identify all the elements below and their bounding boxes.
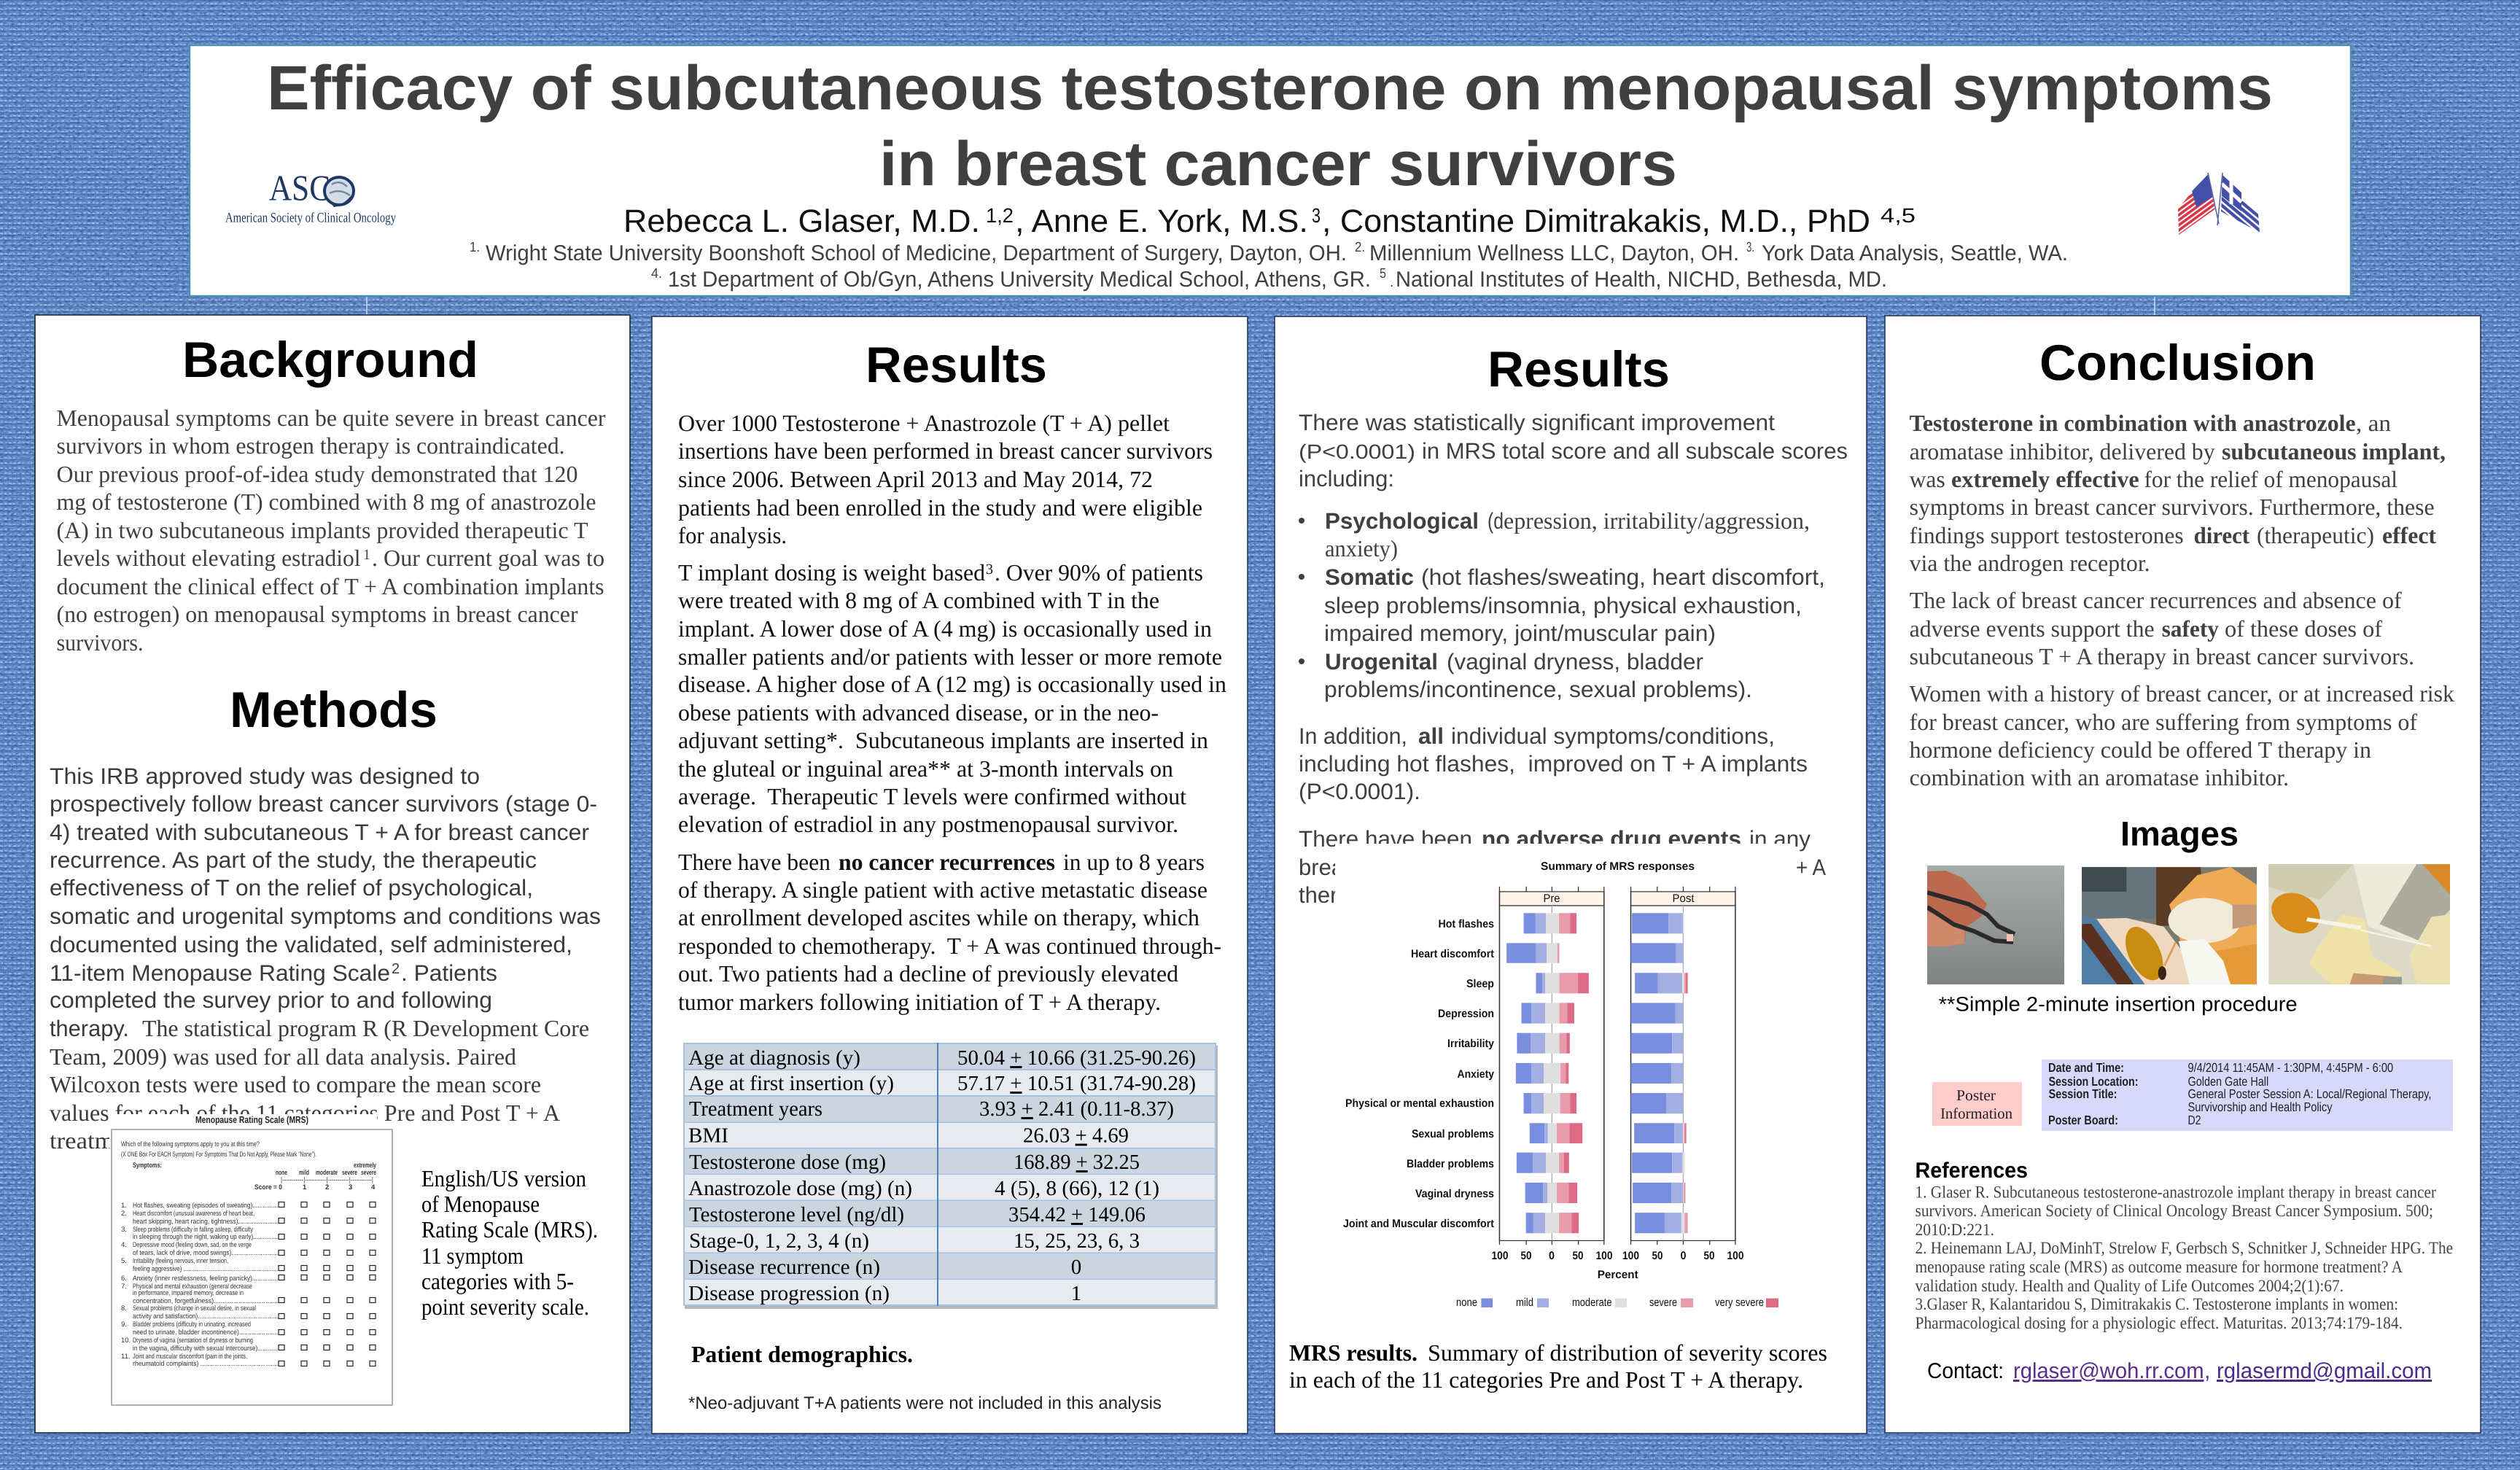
x axis tick labels: 0 bbox=[1680, 1250, 1686, 1262]
figure: Menopause Rating Scale form: concentration, forgetfulness).................................... bbox=[133, 1297, 278, 1305]
caption: MRS results: MRS results bbox=[1289, 1339, 1412, 1366]
table: patient demographics: 3.93 + 2.41 (0.11-8.37) bbox=[979, 1097, 1174, 1121]
figure: Menopause Rating Scale form: 4 bbox=[371, 1183, 376, 1191]
text block: methods: recurrence. As part of the study, the therapeutic bbox=[50, 847, 537, 873]
table: patient demographics: Testosterone dose (mg) bbox=[689, 1151, 886, 1174]
text block: background: (no estrogen) on menopausal symptoms in breast cancer bbox=[57, 601, 578, 627]
heading: Results: Results bbox=[866, 337, 1047, 393]
figure: Menopause Rating Scale form: need to urinate, bladder incontinence)...................... bbox=[133, 1329, 278, 1337]
symptom category labels bbox=[1343, 918, 1494, 1230]
text block: results narrative: of therapy. A single patient with active metastatic disease bbox=[678, 876, 1208, 903]
x axis tick labels: 50 bbox=[1703, 1250, 1715, 1262]
list: symptom subscales bbox=[1299, 508, 1825, 702]
text block: MRS improvement: (P<0.0001) bbox=[1299, 440, 1415, 463]
panel: conclusion, images and references bbox=[1885, 316, 2481, 1433]
text block: methods: . Patients bbox=[401, 960, 497, 986]
figure: Menopause Rating Scale form: Heart discomfort (unusual awareness of heart beat, bbox=[133, 1210, 254, 1218]
symptom category labels: Physical or mental exhaustion bbox=[1345, 1097, 1494, 1110]
heading: Background: Background bbox=[182, 332, 478, 388]
figure: Menopause Rating Scale form bbox=[109, 1114, 395, 1431]
text block: conclusion: for breast cancer, who are suffering from symptoms of bbox=[1910, 709, 2417, 735]
text block: conclusion: extremely effective bbox=[1951, 466, 2139, 492]
text block: conclusion: hormone deficiency could be offered T therapy in bbox=[1910, 736, 2371, 763]
contact emails: Contact: bbox=[1927, 1359, 2004, 1383]
text block: references: 2. Heinemann LAJ, DoMinhT, Strelow F, Gerbsch S, Schnitker J, Schneider HPG. The bbox=[1915, 1239, 2453, 1258]
caption: MRS form description: Rating Scale (MRS). bbox=[421, 1216, 598, 1242]
text block: conclusion: for the relief of menopausal bbox=[2144, 466, 2398, 492]
x axis tick labels: 100 bbox=[1492, 1250, 1508, 1262]
figure: Menopause Rating Scale form: Hot flashes, sweating (episodes of sweating)............... bbox=[133, 1202, 278, 1210]
text block: references: survivors. American Society of Clinical Oncology Breast Cancer Symposium. 500; bbox=[1915, 1202, 2433, 1221]
text block: background: document the clinical effect of T + A combination implants bbox=[57, 573, 604, 599]
affiliations: 2. bbox=[1355, 240, 1365, 255]
text block: references: validation study. Health and Quality of Life Outcomes 2004;2(1):67. bbox=[1915, 1277, 2344, 1296]
text block: results narrative: average. Therapeutic T levels were confirmed without bbox=[678, 783, 1186, 809]
text block: methods: prospectively follow breast cancer survivors (stage 0- bbox=[50, 791, 597, 817]
contact emails bbox=[1927, 1359, 2432, 1383]
text block: results narrative: since 2006. Between April 2013 and May 2014, 72 bbox=[678, 466, 1153, 492]
poster session details: 9/4/2014 11:45AM - 1:30PM, 4:45PM - 6:00 bbox=[2188, 1060, 2393, 1075]
figure: Menopause Rating Scale form: (X ONE Box For EACH Symptom) For Symptoms That Do Not Apply, Please Mark "None"). bbox=[121, 1151, 316, 1159]
text block: methods: values for each of the 11 categories Pre and Post T + A bbox=[50, 1100, 560, 1126]
authors: Rebecca L. Glaser, M.D. bbox=[623, 203, 980, 239]
text block: references bbox=[1915, 1183, 2453, 1333]
text block: results narrative: . Over 90% of patients bbox=[995, 559, 1203, 586]
affiliations: 3. bbox=[1746, 240, 1754, 255]
photo: skin prepared with iodine bbox=[2082, 867, 2257, 984]
affiliations: 1st Department of Ob/Gyn, Athens University Medical School, Athens, GR. bbox=[668, 268, 1371, 292]
text block: background: survivors in whom estrogen therapy is contraindicated. bbox=[57, 432, 564, 459]
authors: 1,2 bbox=[986, 204, 1014, 227]
figure: Menopause Rating Scale form: Which of the following symptoms apply to you at this time? bbox=[121, 1140, 260, 1148]
text block: results narrative: patients had been enrolled in the study and were eligible bbox=[678, 494, 1202, 521]
poster information label: Poster bbox=[1956, 1086, 1996, 1104]
caption: MRS form description: 11 symptom bbox=[421, 1242, 524, 1269]
figure: Menopause Rating Scale form: activity and satisfaction)............................................... bbox=[133, 1312, 278, 1321]
caption: insertion procedure: **Simple 2-minute insertion procedure bbox=[1939, 993, 2298, 1015]
table: patient demographics: Age at diagnosis (y) bbox=[688, 1046, 860, 1070]
x axis tick labels: 50 bbox=[1652, 1250, 1662, 1262]
text block: results narrative: in up to 8 years bbox=[1063, 849, 1205, 875]
footnote: neo-adjuvant patients: *Neo-adjuvant T+A patients were not included in this analysis bbox=[688, 1393, 1162, 1413]
text block: results narrative: implant. A lower dose of A (4 mg) is occasionally used in bbox=[678, 615, 1212, 642]
x axis tick labels: 100 bbox=[1622, 1250, 1639, 1262]
text block: background: 1 bbox=[363, 547, 370, 563]
text block: methods: therapy. bbox=[50, 1016, 129, 1041]
caption: MRS results bbox=[1289, 1339, 1827, 1393]
symptom category labels: Joint and Muscular discomfort bbox=[1343, 1218, 1494, 1230]
figure: Menopause Rating Scale form: none bbox=[276, 1169, 287, 1177]
symptom category labels: Vaginal dryness bbox=[1415, 1188, 1494, 1200]
figure: Menopause Rating Scale form: 6. bbox=[121, 1275, 127, 1283]
list: symptom subscales: impaired memory, joint/muscular pain) bbox=[1324, 621, 1716, 646]
panel: results part 1 bbox=[652, 316, 1248, 1434]
text block: methods: somatic and urogenital symptoms and conditions was bbox=[50, 903, 601, 929]
text block: results narrative: Over 1000 Testosterone + Anastrozole (T + A) pellet bbox=[678, 410, 1170, 436]
symptom category labels: Bladder problems bbox=[1407, 1158, 1494, 1170]
text block: results narrative: no cancer recurrences bbox=[839, 849, 1055, 875]
text block: conclusion: The lack of breast cancer recurrences and absence of bbox=[1910, 587, 2402, 613]
title: Efficacy of subcutaneous testosterone on menopausal symptoms bbox=[267, 53, 2273, 123]
table: patient demographics bbox=[683, 1043, 1218, 1309]
text block: MRS improvement: including: bbox=[1299, 466, 1394, 491]
affiliations: Millennium Wellness LLC, Dayton, OH. bbox=[1369, 241, 1739, 265]
text block: conclusion: (therapeutic) bbox=[2257, 522, 2374, 548]
figure: Menopause Rating Scale form: Sexual problems (change in sexual desire, in sexual bbox=[133, 1304, 256, 1312]
text block: conclusion: direct bbox=[2194, 522, 2249, 548]
heading: Images: Images bbox=[2120, 814, 2239, 853]
text block: adverse events: in any bbox=[1749, 826, 1811, 852]
text block: conclusion: Testosterone in combination with anastrozole bbox=[1910, 410, 2356, 436]
text block: results narrative: tumor markers following initiation of T + A therapy. bbox=[678, 989, 1161, 1015]
list: symptom subscales: problems/incontinence, sexual problems). bbox=[1324, 677, 1752, 702]
symptom category labels: Heart discomfort bbox=[1411, 948, 1494, 960]
figure: Menopause Rating Scale form: in performance, impaired memory, decrease in bbox=[133, 1289, 244, 1297]
text block: results narrative: out. Two patients had a decline of previously elevated bbox=[678, 960, 1178, 987]
figure: Menopause Rating Scale form: Depressive mood (feeling down, sad, on the verge bbox=[133, 1241, 252, 1249]
text block: background: Our previous proof-of-idea study demonstrated that 120 bbox=[57, 461, 578, 487]
figure: Menopause Rating Scale form: mild bbox=[299, 1169, 309, 1177]
figure: Menopause Rating Scale form: 1 bbox=[303, 1183, 307, 1191]
figure: Menopause Rating Scale form: in sleeping through the night, waking up early)............... bbox=[133, 1233, 278, 1241]
figure: Menopause Rating Scale form: Bladder problems (difficulty in urinating, increased bbox=[133, 1321, 251, 1329]
text block: results narrative: at enrollment developed ascites while on therapy, which bbox=[678, 904, 1199, 930]
authors: , Constantine Dimitrakakis, M.D., PhD bbox=[1322, 203, 1870, 239]
symptom category labels: Sexual problems bbox=[1412, 1128, 1494, 1140]
text block: conclusion: subcutaneous implant, bbox=[2222, 438, 2446, 464]
text block: conclusion: subcutaneous T + A therapy in breast cancer survivors. bbox=[1910, 643, 2414, 669]
text block: background: Menopausal symptoms can be quite severe in breast cancer bbox=[57, 405, 606, 431]
table: patient demographics: 168.89 + 32.25 bbox=[1014, 1151, 1140, 1174]
contact emails: rglasermd@gmail.com bbox=[2217, 1359, 2432, 1383]
affiliations bbox=[470, 240, 2068, 292]
text block: methods: 4) treated with subcutaneous T + A for breast cancer bbox=[50, 820, 589, 845]
authors bbox=[623, 203, 1916, 239]
text block: methods: completed the survey prior to and following bbox=[50, 987, 492, 1013]
text block: results narrative: T implant dosing is weight based bbox=[678, 559, 985, 586]
logo: ASCO: American Society of Clinical Oncology bbox=[225, 210, 396, 226]
panel: background and methods bbox=[35, 315, 630, 1433]
caption: MRS results: Summary of distribution of severity scores bbox=[1428, 1339, 1827, 1366]
table: patient demographics: 57.17 + 10.51 (31.74-90.28) bbox=[957, 1072, 1196, 1095]
list: symptom subscales: Psychological bbox=[1325, 508, 1479, 534]
title: in breast cancer survivors bbox=[879, 129, 1677, 199]
text block: conclusion: of these doses of bbox=[2225, 615, 2382, 642]
table: patient demographics: Stage-0, 1, 2, 3, 4 (n) bbox=[689, 1229, 869, 1253]
text block: conclusion: findings support testosterones bbox=[1910, 522, 2184, 548]
text block: adverse events: therapy. bbox=[1299, 882, 1379, 908]
table: patient demographics: Age at first insertion (y) bbox=[688, 1072, 894, 1095]
text block: conclusion: combination with an aromatase inhibitor. bbox=[1910, 764, 2289, 790]
text block: individual symptoms: (P<0.0001). bbox=[1299, 779, 1420, 804]
text block: results narrative: There have been bbox=[678, 849, 831, 875]
text block: references: 2010:D:221. bbox=[1915, 1221, 1994, 1240]
text block: methods: treatment therapy. bbox=[50, 1127, 232, 1154]
list: symptom subscales: Urogenital bbox=[1325, 649, 1438, 674]
chart: Summary of MRS responses: Summary of MRS responses bbox=[1541, 860, 1695, 873]
affiliations: 4. bbox=[651, 266, 662, 281]
legend: none bbox=[1456, 1296, 1477, 1309]
text block: methods: This IRB approved study was designed to bbox=[50, 763, 480, 789]
icon: crossed US and Greek flags bbox=[2178, 172, 2260, 235]
affiliations: National Institutes of Health, NICHD, Bethesda, MD. bbox=[1396, 268, 1887, 292]
text block: adverse events: There have been bbox=[1299, 826, 1472, 852]
text block: results narrative: the gluteal or inguinal area** at 3-month intervals on bbox=[678, 755, 1173, 782]
symptom category labels: Hot flashes bbox=[1438, 918, 1494, 930]
chart: Summary of MRS responses: Post bbox=[1673, 892, 1695, 905]
affiliations: 5 bbox=[1380, 266, 1386, 281]
text block: adverse events: breast cancer bbox=[1299, 855, 1436, 880]
symptom category labels: Sleep bbox=[1466, 978, 1494, 990]
panel: results part 2 bbox=[1275, 316, 1867, 1434]
symptom category labels: Irritability bbox=[1447, 1038, 1494, 1050]
table: patient demographics: 50.04 + 10.66 (31.25-90.26) bbox=[957, 1046, 1196, 1070]
photo: implant insertion with trocar bbox=[2263, 864, 2450, 984]
legend: severe bbox=[1649, 1296, 1677, 1309]
figure: Menopause Rating Scale form: severe bbox=[342, 1169, 357, 1177]
caption: patient demographics: Patient demographics. bbox=[691, 1341, 913, 1368]
text block: MRS improvement bbox=[1299, 410, 1848, 491]
figure: Menopause Rating Scale form: Score = 0 bbox=[254, 1183, 282, 1191]
text block: results narrative bbox=[678, 410, 1226, 1015]
text block: conclusion: symptoms in breast cancer survivors. Furthermore, these bbox=[1910, 494, 2435, 520]
figure: Menopause Rating Scale form: Anxiety (inner restlessness, feeling panicky)............... bbox=[133, 1275, 278, 1283]
figure: Menopause Rating Scale form: severe bbox=[361, 1169, 376, 1177]
x axis tick labels: 100 bbox=[1595, 1250, 1613, 1262]
x axis tick labels: 0 bbox=[1549, 1250, 1555, 1262]
text block: results narrative: adjuvant setting*. Subcutaneous implants are inserted in bbox=[678, 727, 1208, 753]
text block: results narrative: elevation of estradiol in any postmenopausal survivor. bbox=[678, 811, 1178, 837]
text block: references: Pharmacological dosing for a physiologic effect. Maturitas. 2013;74:179-184. bbox=[1915, 1314, 2403, 1333]
x axis tick labels bbox=[1492, 1250, 1744, 1262]
Post facet bbox=[1631, 887, 1735, 1245]
figure: Menopause Rating Scale form: Dryness of vagina (sensation of dryness or burning bbox=[133, 1337, 253, 1345]
x axis tick labels: 100 bbox=[1727, 1250, 1744, 1262]
text block: conclusion: Women with a history of breast cancer, or at increased risk bbox=[1910, 680, 2454, 707]
poster session details: General Poster Session A: Local/Regional Therapy, bbox=[2188, 1086, 2431, 1101]
text block: results narrative: smaller patients and/or patients with lesser or more remote bbox=[678, 643, 1222, 669]
figure: Menopause Rating Scale form: 10. bbox=[121, 1337, 131, 1345]
logo: ASCO: ASC bbox=[269, 168, 330, 209]
authors: , Anne E. York, M.S. bbox=[1015, 203, 1308, 239]
figure: Menopause Rating Scale form: Physical and mental exhaustion (general decrease bbox=[133, 1283, 252, 1291]
legend: mild bbox=[1516, 1296, 1533, 1309]
logo: ASCO bbox=[225, 168, 396, 226]
figure: Menopause Rating Scale form: Symptoms: bbox=[133, 1162, 162, 1170]
text block: adverse events: + A bbox=[1796, 855, 1826, 880]
contact emails: rglaser@woh.rr.com bbox=[2013, 1359, 2204, 1383]
list: symptom subscales: epression, irritability/aggression, bbox=[1504, 508, 1810, 534]
poster information label: Information bbox=[1940, 1105, 2012, 1122]
list: symptom subscales: anxiety) bbox=[1325, 535, 1398, 561]
x axis title: Percent bbox=[1598, 1269, 1638, 1281]
figure: Menopause Rating Scale form: moderate bbox=[316, 1169, 338, 1177]
list: symptom subscales: (hot flashes/sweating, heart discomfort, bbox=[1421, 564, 1825, 590]
text block: results narrative: insertions have been performed in breast cancer survivors bbox=[678, 438, 1213, 464]
figure: Menopause Rating Scale form: 5. bbox=[121, 1257, 127, 1265]
text block: background: levels without elevating estradiol bbox=[57, 545, 361, 571]
figure: Menopause Rating Scale form: 11. bbox=[121, 1353, 131, 1361]
text block: conclusion bbox=[1910, 410, 2454, 790]
table: patient demographics: 1 bbox=[1071, 1282, 1081, 1305]
text block: methods: The statistical program R (R Development Core bbox=[142, 1015, 589, 1041]
figure: Menopause Rating Scale form: Sleep problems (difficulty in falling asleep, difficulty bbox=[133, 1226, 253, 1234]
figure: Menopause Rating Scale form: rheumatoid complaints) ............................................ bbox=[133, 1360, 278, 1368]
table: patient demographics: 0 bbox=[1071, 1256, 1081, 1279]
title bbox=[267, 53, 2273, 199]
header banner bbox=[190, 45, 2351, 296]
figure: Menopause Rating Scale form: 2 bbox=[325, 1183, 329, 1191]
text block: adverse events: no adverse drug events bbox=[1482, 826, 1741, 852]
heading: Results: Results bbox=[1488, 341, 1670, 397]
text block: results narrative: obese patients with advanced disease, or in the neo- bbox=[678, 699, 1159, 726]
poster information label bbox=[1932, 1082, 2022, 1126]
chart: Summary of MRS responses: Pre bbox=[1543, 892, 1560, 905]
text block: methods: documented using the validated, self administered, bbox=[50, 932, 572, 957]
text block: individual symptoms: In addition, bbox=[1299, 723, 1407, 749]
caption: MRS form description: English/US version bbox=[421, 1165, 586, 1191]
figure: Menopause Rating Scale form: 3. bbox=[121, 1226, 127, 1234]
table: patient demographics: 4 (5), 8 (66), 12 (1) bbox=[995, 1177, 1159, 1200]
list: symptom subscales: (vaginal dryness, bladder bbox=[1447, 649, 1703, 674]
list: symptom subscales: Somatic bbox=[1325, 564, 1414, 590]
figure: Menopause Rating Scale form: |-----------|-----------|-----------|-----------| bbox=[281, 1176, 373, 1184]
caption: MRS form description: point severity scale. bbox=[421, 1294, 589, 1320]
text block: methods: 2 bbox=[392, 961, 400, 977]
table: patient demographics: BMI bbox=[688, 1124, 728, 1148]
affiliations: 1. bbox=[470, 240, 480, 255]
text block: methods bbox=[50, 763, 601, 1154]
figure: Menopause Rating Scale form: heart skipping, heart racing, tightness)....................... bbox=[133, 1218, 278, 1226]
table: patient demographics: Disease recurrence (n) bbox=[688, 1256, 880, 1279]
figure: Menopause Rating Scale form: 9. bbox=[121, 1321, 127, 1329]
affiliations: York Data Analysis, Seattle, WA. bbox=[1762, 241, 2068, 265]
poster session details bbox=[2042, 1059, 2453, 1131]
text block: MRS improvement: There was statistically significant improvement bbox=[1299, 410, 1775, 435]
text block: methods: Wilcoxon tests were used to compare the mean score bbox=[50, 1071, 541, 1097]
figure: Menopause Rating Scale form: of tears, lack of drive, mood swings)........................... bbox=[133, 1249, 278, 1257]
text block: background: . Our current goal was to bbox=[372, 545, 604, 571]
text block: conclusion: , an bbox=[2356, 410, 2391, 436]
figure: Menopause Rating Scale form: Menopause Rating Scale (MRS) bbox=[195, 1114, 308, 1125]
text block: results narrative: for analysis. bbox=[678, 522, 787, 548]
poster session details: Session Title: bbox=[2049, 1086, 2118, 1101]
authors: 3 bbox=[1312, 204, 1321, 227]
text block: references: menopause rating scale (MRS) as outcome measure for hormone treatment? A bbox=[1915, 1258, 2403, 1277]
text block: individual symptoms: individual symptoms/conditions, bbox=[1451, 723, 1775, 749]
figure: Menopause Rating Scale form: Irritability (feeling nervous, inner tension, bbox=[133, 1257, 228, 1265]
photo: pellet applicator held in fingers bbox=[1927, 866, 2064, 984]
text block: background: survivors. bbox=[57, 629, 143, 656]
heading: Methods: Methods bbox=[230, 682, 438, 738]
affiliations: Wright State University Boonshoft School of Medicine, Department of Surgery, Dayton, OH. bbox=[486, 241, 1347, 265]
figure: Menopause Rating Scale form: 3 bbox=[349, 1183, 352, 1191]
text block: conclusion: adverse events support the bbox=[1910, 615, 2155, 642]
table: patient demographics: Anastrozole dose (mg) (n) bbox=[688, 1177, 912, 1200]
text block: conclusion: aromatase inhibitor, delivered by bbox=[1910, 438, 2215, 464]
heading: References: References bbox=[1915, 1159, 2028, 1183]
table: patient demographics: Testosterone level (ng/dl) bbox=[689, 1203, 904, 1226]
text block: individual symptoms: all bbox=[1418, 723, 1444, 749]
poster session details: D2 bbox=[2188, 1113, 2201, 1127]
text block: background: mg of testosterone (T) combined with 8 mg of anastrozole bbox=[57, 489, 596, 515]
poster session details: Golden Gate Hall bbox=[2188, 1074, 2268, 1089]
figure: Menopause Rating Scale form: 8. bbox=[121, 1304, 127, 1312]
affiliations: . bbox=[1390, 275, 1393, 290]
text block: conclusion: via the androgen receptor. bbox=[1910, 550, 2150, 576]
text block: individual symptoms: including hot flashes, improved on T + A implants bbox=[1299, 751, 1808, 777]
table: patient demographics: 26.03 + 4.69 bbox=[1023, 1124, 1129, 1148]
legend: very severe bbox=[1715, 1296, 1764, 1309]
figure: Menopause Rating Scale form: 1. bbox=[121, 1202, 127, 1210]
caption: MRS form description: categories with 5- bbox=[421, 1268, 574, 1294]
symptom category labels: Depression bbox=[1438, 1008, 1494, 1020]
contact emails: , bbox=[2204, 1359, 2210, 1383]
authors: 4,5 bbox=[1881, 204, 1916, 227]
legend: moderate bbox=[1572, 1296, 1611, 1309]
figure: Menopause Rating Scale form: 2. bbox=[121, 1210, 127, 1218]
text block: methods: effectiveness of T on the relief of psychological, bbox=[50, 875, 533, 901]
caption: MRS results: in each of the 11 categories Pre and Post T + A therapy. bbox=[1289, 1366, 1803, 1393]
text block: results narrative: were treated with 8 mg of A combined with T in the bbox=[678, 587, 1159, 613]
heading: Conclusion: Conclusion bbox=[2039, 335, 2316, 391]
Pre facet bbox=[1499, 887, 1604, 1245]
text block: conclusion: was bbox=[1910, 466, 1945, 492]
chart: Summary of MRS responses bbox=[1335, 844, 1794, 1318]
list: symptom subscales: sleep problems/insomnia, physical exhaustion, bbox=[1324, 593, 1802, 618]
text block: results narrative: responded to chemotherapy. T + A was continued through- bbox=[678, 933, 1221, 959]
list: symptom subscales: (d bbox=[1488, 508, 1504, 534]
poster session details: Date and Time: bbox=[2048, 1060, 2124, 1075]
table: patient demographics: Disease progression (n) bbox=[688, 1282, 890, 1305]
text block: MRS improvement: in MRS total score and all subscale scores bbox=[1422, 438, 1848, 464]
symptom category labels: Anxiety bbox=[1457, 1068, 1494, 1081]
figure: Menopause Rating Scale form: Joint and muscular discomfort (pain in the joints, bbox=[133, 1353, 247, 1361]
legend bbox=[1456, 1296, 1778, 1309]
text block: adverse events bbox=[1299, 826, 1826, 908]
figure: Menopause Rating Scale form: 7. bbox=[121, 1283, 127, 1291]
table: patient demographics: 354.42 + 149.06 bbox=[1008, 1203, 1146, 1226]
text block: methods: Team, 2009) was used for all data analysis. Paired bbox=[50, 1043, 516, 1070]
poster session details: Survivorship and Health Policy bbox=[2188, 1100, 2333, 1114]
figure: Menopause Rating Scale form: in the vagina, difficulty with sexual intercourse)............ bbox=[133, 1345, 278, 1353]
caption: MRS form description: of Menopause bbox=[421, 1191, 540, 1217]
text block: references: 3.Glaser R, Kalantaridou S, Dimitrakakis C. Testosterone implants in women: bbox=[1915, 1295, 2398, 1314]
poster session details: Session Location: bbox=[2049, 1074, 2138, 1089]
caption: MRS results: . bbox=[1412, 1339, 1418, 1366]
text block: background: (A) in two subcutaneous implants provided therapeutic T bbox=[57, 517, 588, 543]
text block: methods: 11-item Menopause Rating Scale bbox=[50, 960, 390, 986]
x axis tick labels: 50 bbox=[1521, 1250, 1531, 1262]
figure: Menopause Rating Scale form: feeling aggressive) .......................................................... bbox=[133, 1265, 278, 1273]
caption: MRS form description bbox=[421, 1165, 598, 1320]
text block: conclusion: safety bbox=[2162, 615, 2219, 642]
poster session details: Poster Board: bbox=[2048, 1113, 2118, 1127]
table: patient demographics: Treatment years bbox=[689, 1097, 822, 1121]
text block: results narrative: 3 bbox=[986, 561, 993, 578]
text block: results narrative: disease. A higher dose of A (12 mg) is occasionally used in bbox=[678, 671, 1226, 697]
text block: conclusion: effect bbox=[2382, 522, 2436, 548]
text block: background bbox=[57, 405, 606, 656]
table: patient demographics: 15, 25, 23, 6, 3 bbox=[1014, 1229, 1140, 1253]
x axis tick labels: 50 bbox=[1572, 1250, 1584, 1262]
figure: Menopause Rating Scale form: 4. bbox=[121, 1241, 127, 1249]
figure: Menopause Rating Scale form: extremely bbox=[354, 1162, 376, 1170]
text block: references: 1. Glaser R. Subcutaneous testosterone-anastrozole implant therapy in breast cancer bbox=[1915, 1183, 2436, 1202]
text block: individual symptoms bbox=[1299, 723, 1808, 804]
